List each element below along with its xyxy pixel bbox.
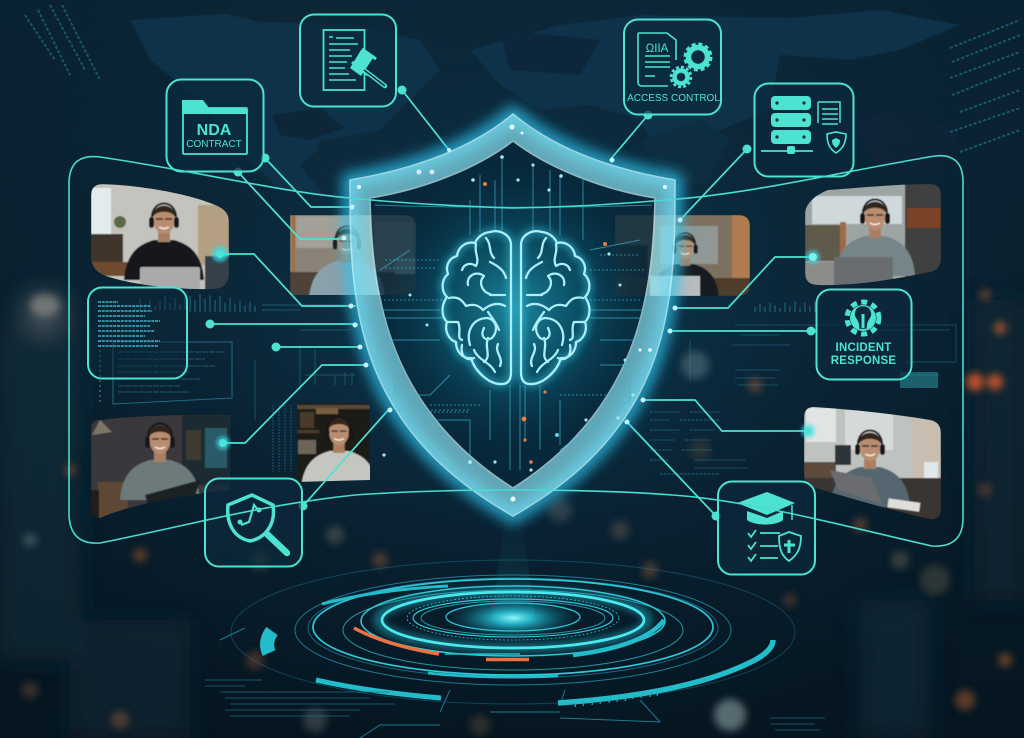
ring glow bbox=[378, 592, 648, 648]
base readout text lines bbox=[205, 680, 825, 730]
rings bbox=[313, 579, 713, 675]
shield glow bbox=[350, 114, 675, 516]
world map bbox=[130, 2, 960, 195]
brain icon bbox=[442, 231, 590, 384]
base core glow bbox=[445, 596, 581, 640]
shield bbox=[350, 114, 675, 516]
left hemisphere bbox=[442, 231, 511, 384]
light beam bbox=[492, 505, 535, 618]
hud teal tag bbox=[900, 372, 938, 388]
icon: NDA contract folder bbox=[166, 80, 264, 172]
shield inner dark area bbox=[370, 141, 655, 488]
photo: remote worker lower middle left bbox=[297, 403, 370, 482]
photo: remote worker bottom left bbox=[91, 410, 231, 522]
photo: remote worker bottom right bbox=[804, 406, 941, 520]
icon: access control bbox=[624, 20, 721, 114]
icon: legal document with gavel bbox=[300, 14, 396, 106]
icon: training checklist with graduation cap bbox=[718, 482, 815, 574]
shield circuit lines bbox=[375, 158, 652, 470]
brain glow bbox=[442, 231, 590, 384]
icon: incident response: INCIDENT bbox=[836, 342, 891, 354]
shield brain glow bbox=[380, 170, 650, 450]
photo: remote worker top right bbox=[805, 184, 941, 287]
photo: remote worker behind shield right bbox=[612, 215, 750, 298]
orange arc segments bbox=[354, 628, 529, 660]
photo: remote worker top left bbox=[91, 184, 229, 290]
icon: incident response bbox=[816, 290, 912, 380]
icon: code review box bbox=[88, 288, 187, 378]
icon: access control: ACCESS CONTROL bbox=[627, 93, 720, 104]
icon: NDA contract folder: NDA bbox=[197, 122, 232, 139]
right hemisphere bbox=[521, 231, 590, 384]
hud data rows right bbox=[650, 301, 956, 474]
shield side node dots bbox=[342, 148, 682, 424]
code streams top corners bbox=[25, 5, 1020, 152]
shield circuit dots bbox=[382, 155, 642, 472]
icon: incident response: RESPONSE bbox=[831, 355, 896, 367]
floating hud panel outline: left bbox=[69, 157, 513, 543]
city bokeh background bbox=[0, 290, 1024, 738]
photo: remote worker behind shield left bbox=[290, 215, 416, 299]
shield band bbox=[350, 114, 675, 516]
hud data rows left bbox=[100, 294, 355, 472]
icon: access control: ΩIIA bbox=[646, 43, 669, 55]
orange nodes bbox=[483, 182, 607, 464]
icon: server with checklist and shield bbox=[754, 84, 854, 176]
floating hud panel outline: right bbox=[513, 156, 963, 546]
outer hud arcs bbox=[220, 560, 795, 738]
icon: magnifier with shield bbox=[205, 478, 302, 566]
connector node dots bbox=[206, 86, 820, 520]
icon: NDA contract folder: CONTRACT bbox=[186, 139, 242, 150]
shield rim dots bbox=[357, 124, 667, 502]
holographic base platform bbox=[205, 505, 825, 738]
teal arc segments bbox=[267, 586, 773, 703]
connector lines bbox=[210, 90, 816, 516]
base tick marks bbox=[575, 692, 658, 707]
